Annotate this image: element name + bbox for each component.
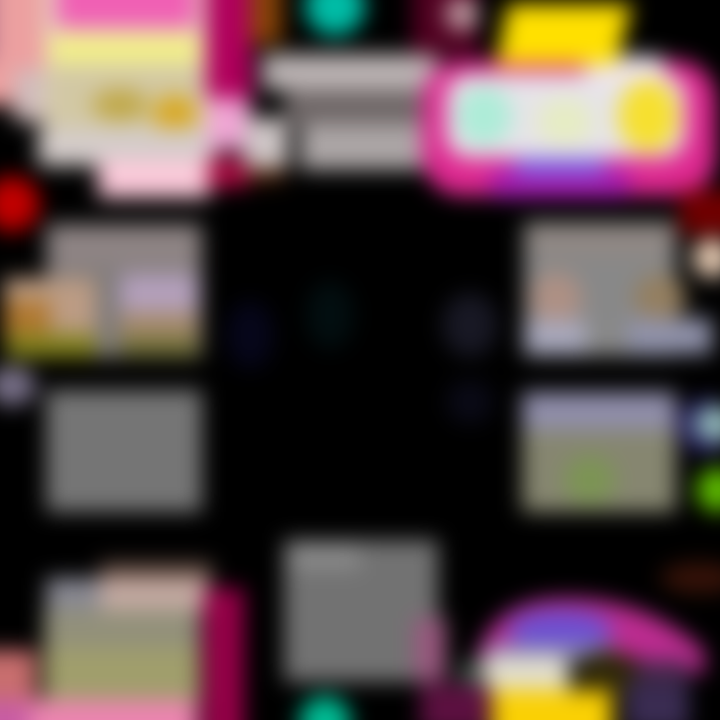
- corner accent: bottom right: [660, 562, 720, 594]
- icon: right teal: [678, 398, 720, 454]
- icon: right small top: [692, 238, 720, 278]
- icon: right green: [696, 468, 720, 512]
- panel: left card two: [46, 390, 202, 512]
- icon: teal circle top: [305, 0, 365, 36]
- panel: right card two: [522, 392, 676, 512]
- icon: yellow header shape: [496, 4, 632, 64]
- panel: bottom left card: [44, 562, 212, 702]
- panel: center dim column: [226, 281, 498, 424]
- panel: bottom center card: [284, 540, 446, 682]
- panel: top right badge: [422, 56, 716, 198]
- panel: bottom left ribbon: [0, 588, 244, 720]
- icon: left small: [0, 366, 36, 406]
- panel: left card one: [4, 224, 202, 358]
- icon: small dot top: [412, 0, 479, 55]
- panel: bottom right badge: [420, 598, 704, 720]
- icon: teal circle bottom: [299, 696, 351, 720]
- panel: top left card: [0, 0, 216, 198]
- panel: top left ribbon: [206, 0, 284, 188]
- corner accent: top right: [680, 190, 720, 234]
- title: [244, 54, 438, 170]
- icon: red circle: [0, 176, 40, 232]
- panel: right card one: [524, 222, 712, 356]
